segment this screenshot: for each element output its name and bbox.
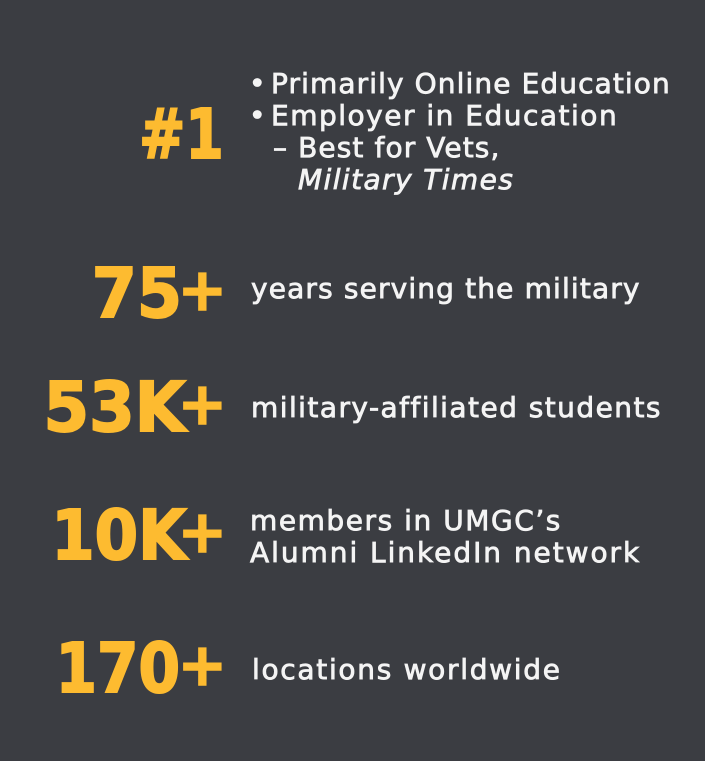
line: primarily online education: Primarily Online Education xyxy=(271,67,671,100)
line: best for vets: – Best for Vets, xyxy=(273,131,500,164)
text: alumni members xyxy=(250,504,641,569)
line: employer in education: Employer in Education xyxy=(271,99,618,132)
stat: 170+ number: 170 xyxy=(55,629,180,709)
line: alumni linkedin network: Alumni LinkedIn network xyxy=(250,536,641,569)
stat: 75+ number: + xyxy=(178,255,227,324)
stat: 53K+ number: 53K xyxy=(44,368,186,448)
text: students: military-affiliated students xyxy=(251,391,662,424)
stat: 10K+ number: 10K xyxy=(51,496,187,576)
text: years serving: years serving the military xyxy=(251,272,641,305)
text: locations: locations worldwide xyxy=(252,653,562,686)
stat: 75+ number: 75 xyxy=(91,254,182,334)
line: military times: Military Times xyxy=(298,163,514,196)
line: members in UMGC's: members in UMGC’s xyxy=(250,504,562,537)
stat: 75+ number xyxy=(91,254,227,334)
bullet 2: • xyxy=(249,99,266,132)
stat: 53K+ number: + xyxy=(178,369,227,438)
stat: 170+ number: + xyxy=(178,630,227,699)
stat: 10K+ number: + xyxy=(178,497,227,566)
bullet 1: • xyxy=(249,67,266,100)
text: rankings list xyxy=(249,67,671,196)
stat: #1 number: #1 xyxy=(139,95,224,175)
